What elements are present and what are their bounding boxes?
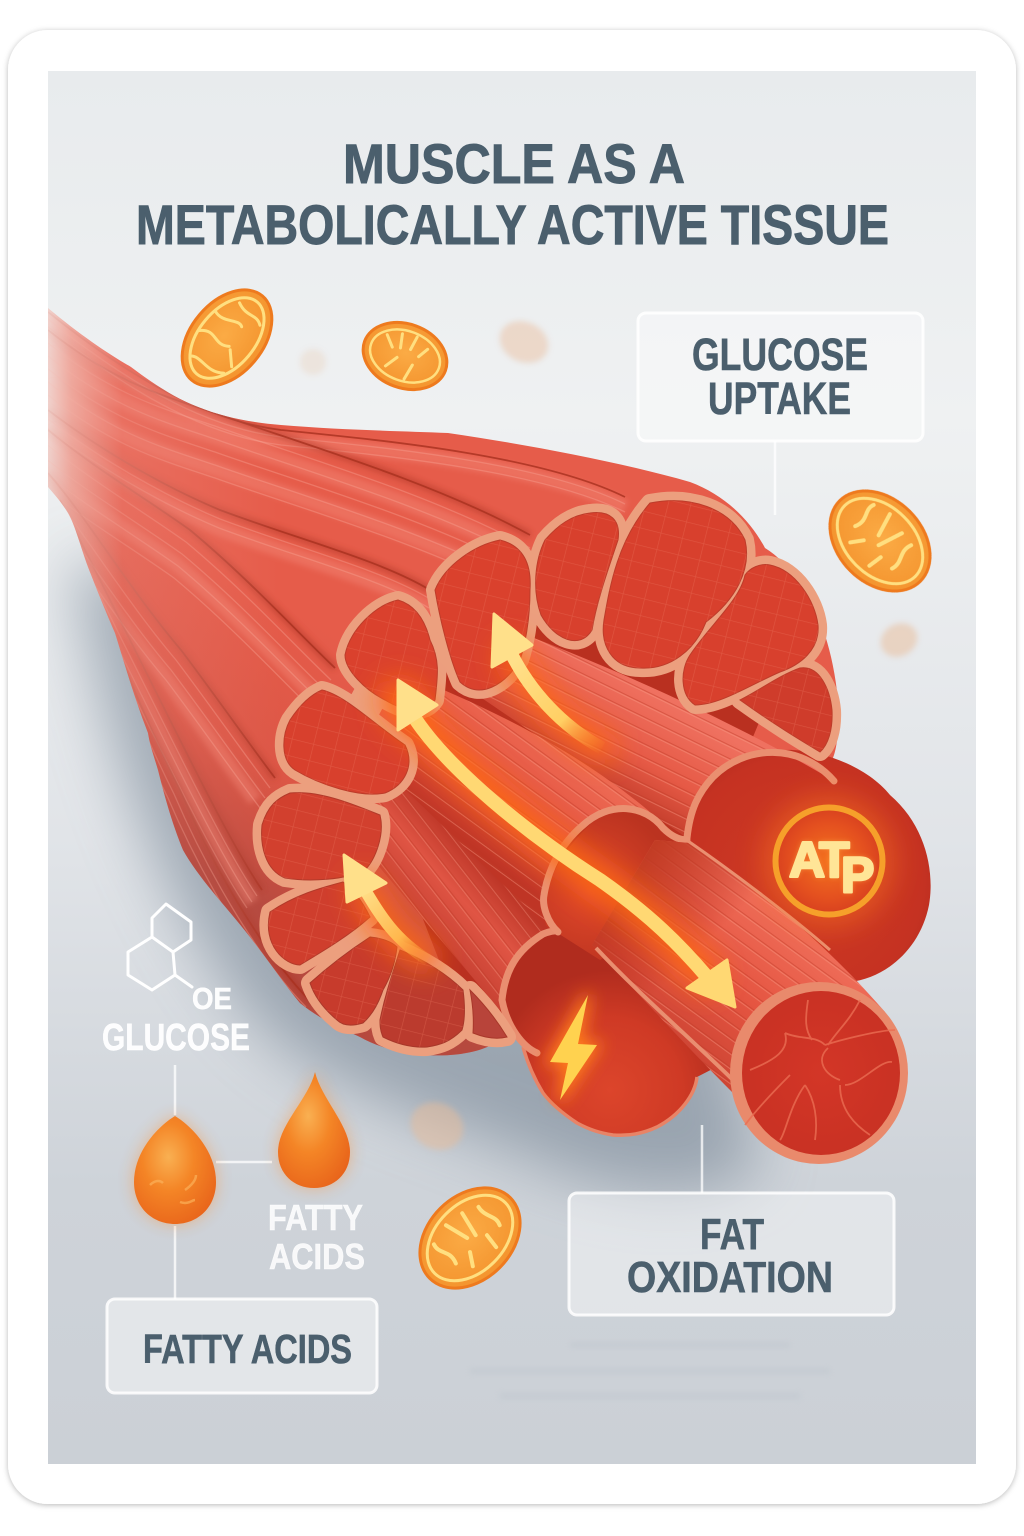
label: glucose in white: OE [192, 981, 232, 1016]
label: fatty acids in white: ACIDS [269, 1236, 365, 1277]
label: glucose in white: GLUCOSE [102, 1017, 250, 1059]
icon: fatty-acid droplet right [278, 1072, 350, 1188]
callout: fatty acids [107, 1299, 377, 1393]
title: METABOLICALLY ACTIVE TISSUE [136, 193, 889, 256]
icon: mitochondrion bottom [418, 1186, 522, 1290]
glowing arrows [344, 614, 735, 1007]
icon: ATP badge [763, 795, 895, 927]
icon: ATP badge: T [819, 832, 850, 888]
icon: mitochondrion right [828, 489, 932, 593]
leader lines [175, 441, 775, 1299]
callout: fat oxidation: OXIDATION [627, 1253, 833, 1302]
middle tube [406, 690, 690, 960]
faded mitochondria blobs [300, 313, 923, 1158]
icon: ATP badge: A [789, 832, 825, 888]
icon: glucose hexagon molecule [128, 904, 192, 990]
muscle fibre bundle body [28, 300, 848, 1070]
callout: fat oxidation: FAT [700, 1210, 764, 1259]
icon: ATP badge: T [819, 832, 850, 888]
icon: fatty-acid droplet left [134, 1116, 216, 1224]
end cap cross-section [730, 982, 908, 1164]
lower tube with open end [379, 790, 710, 1137]
upper tube with open end [470, 625, 931, 982]
callout: glucose uptake [638, 313, 923, 441]
arrow: long double-headed [398, 680, 735, 1007]
muscle cast shadow [70, 560, 760, 1191]
icon: ATP badge: P [841, 847, 874, 903]
cross-section ring of fascicles [262, 501, 832, 1047]
dark hollow behind the inner tubes [422, 625, 758, 1013]
front tube with solid end cap [592, 840, 908, 1164]
fascicle faces [262, 501, 832, 1047]
arrow: lower [344, 855, 428, 960]
faint floor streaks [470, 1345, 830, 1396]
title [136, 132, 889, 256]
icon: ATP badge: A [789, 832, 825, 888]
callout: glucose uptake: GLUCOSE [692, 329, 868, 380]
icon: mitochondrion top left [180, 288, 274, 388]
icon: ATP badge: P [841, 847, 874, 903]
label: fatty acids in white [268, 1197, 365, 1277]
arrow: upper [492, 614, 602, 748]
illustration: muscle scene [48, 288, 932, 1298]
callout: fatty acids: FATTY ACIDS [143, 1326, 352, 1372]
label: glucose in white [102, 981, 250, 1059]
label: fatty acids in white: FATTY [268, 1197, 363, 1238]
callout: glucose uptake: UPTAKE [708, 373, 851, 424]
callout: fat oxidation [569, 1193, 894, 1315]
icon: lightning bolt [550, 995, 597, 1100]
icon: mitochondrion top centre [362, 320, 448, 392]
title: MUSCLE AS A [343, 132, 685, 195]
